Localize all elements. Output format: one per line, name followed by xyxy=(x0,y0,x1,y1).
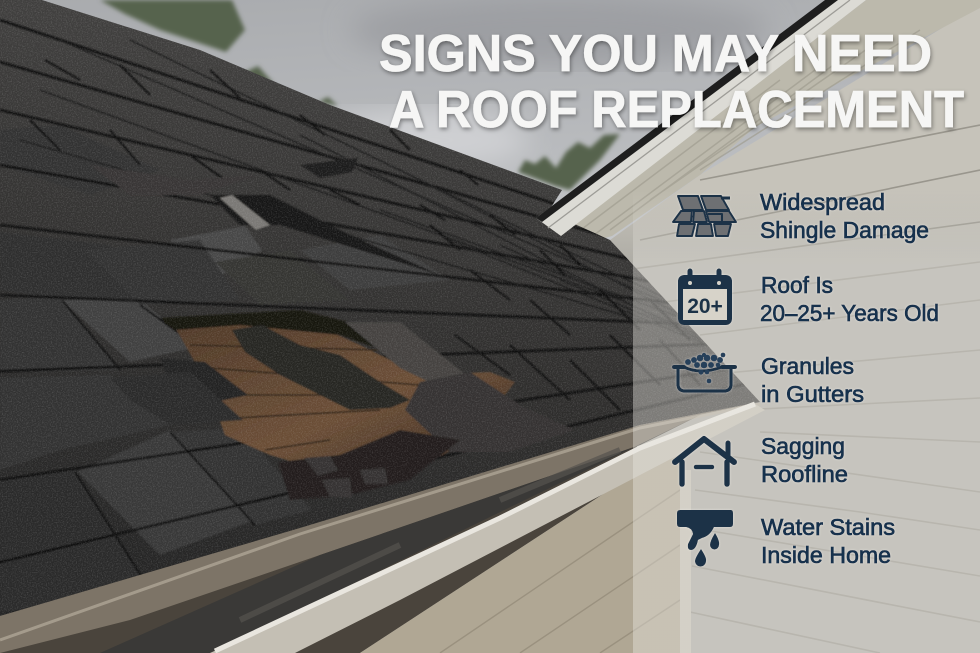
under-eave fascia xyxy=(0,402,760,653)
text: roof age: 20–25+ Years Old xyxy=(760,300,939,326)
text: sagging: Roofline xyxy=(761,461,848,487)
gutter with granules xyxy=(100,415,700,653)
shingle joints xyxy=(30,60,700,590)
text: sagging: Sagging xyxy=(761,433,845,459)
text: sagging xyxy=(761,433,848,487)
text: widespread shingle damage: Shingle Damage xyxy=(760,217,929,243)
shingles xyxy=(0,0,759,616)
light and dark shingle patches xyxy=(1,124,136,186)
text: water stains: Inside Home xyxy=(761,542,891,568)
dark gap above the hole xyxy=(160,310,374,348)
text: widespread shingle damage xyxy=(760,189,929,243)
text: widespread shingle damage: Widespread xyxy=(760,189,885,215)
translucent panel xyxy=(633,190,980,653)
lower ground fill xyxy=(0,300,980,653)
lower wall under gutter xyxy=(360,440,684,653)
icon: granules in gutter xyxy=(674,353,735,391)
text: granules: Granules xyxy=(761,353,854,379)
icon: water stain xyxy=(677,510,733,566)
siding lines xyxy=(625,125,980,653)
soffit xyxy=(560,0,980,242)
corner post xyxy=(680,470,691,653)
icon: shingles xyxy=(673,196,736,236)
title: SIGNS YOU MAY NEED xyxy=(379,25,932,83)
icon: calendar 20+ xyxy=(678,271,732,325)
granule crumbles xyxy=(304,456,388,498)
icon: calendar 20+: 20+ xyxy=(687,295,723,318)
text: water stains xyxy=(761,514,895,568)
torn pieces upper xyxy=(220,195,270,230)
sky xyxy=(0,0,980,300)
torn shingles xyxy=(232,325,410,410)
exposed wood decking xyxy=(176,324,515,462)
trees xyxy=(100,0,620,190)
white gutter xyxy=(210,404,765,653)
gable fascia xyxy=(536,0,866,236)
roof deck xyxy=(0,0,760,616)
list of signs xyxy=(673,189,939,568)
text: water stains: Water Stains xyxy=(761,514,895,540)
house wall xyxy=(360,5,980,653)
title xyxy=(379,25,964,139)
course lines xyxy=(0,18,745,564)
text: granules xyxy=(761,353,864,407)
icon: sagging house xyxy=(675,439,734,484)
text: roof age xyxy=(760,272,939,326)
text: roof age: Roof Is xyxy=(761,272,833,298)
granule texture xyxy=(0,0,770,620)
text: granules: in Gutters xyxy=(761,381,864,407)
